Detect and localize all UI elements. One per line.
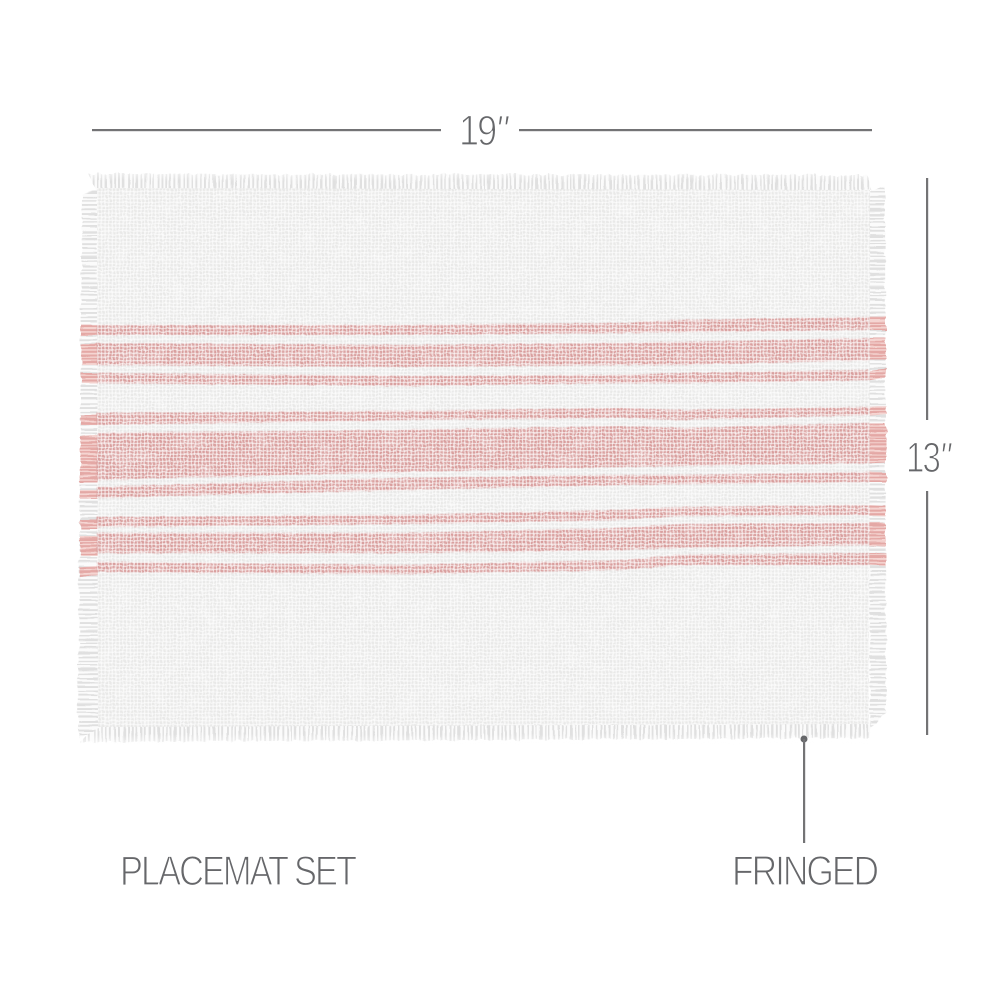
label: 13 inches: 13" — [906, 434, 952, 482]
weave texture — [97, 188, 870, 727]
woven body — [97, 188, 870, 727]
pink stripes — [97, 317, 869, 574]
placemat product — [78, 172, 886, 744]
left fringe — [78, 190, 99, 738]
caption: fringed: FRINGED — [732, 847, 878, 894]
caption: placemat set: PLACEMAT SET — [120, 847, 356, 894]
callout: fringed leader line — [800, 736, 808, 843]
top fringe — [86, 172, 872, 191]
bottom fringe — [78, 720, 872, 744]
right fringe — [868, 186, 886, 728]
fabric mottling — [98, 191, 868, 723]
label: 19 inches: 19" — [459, 107, 509, 155]
